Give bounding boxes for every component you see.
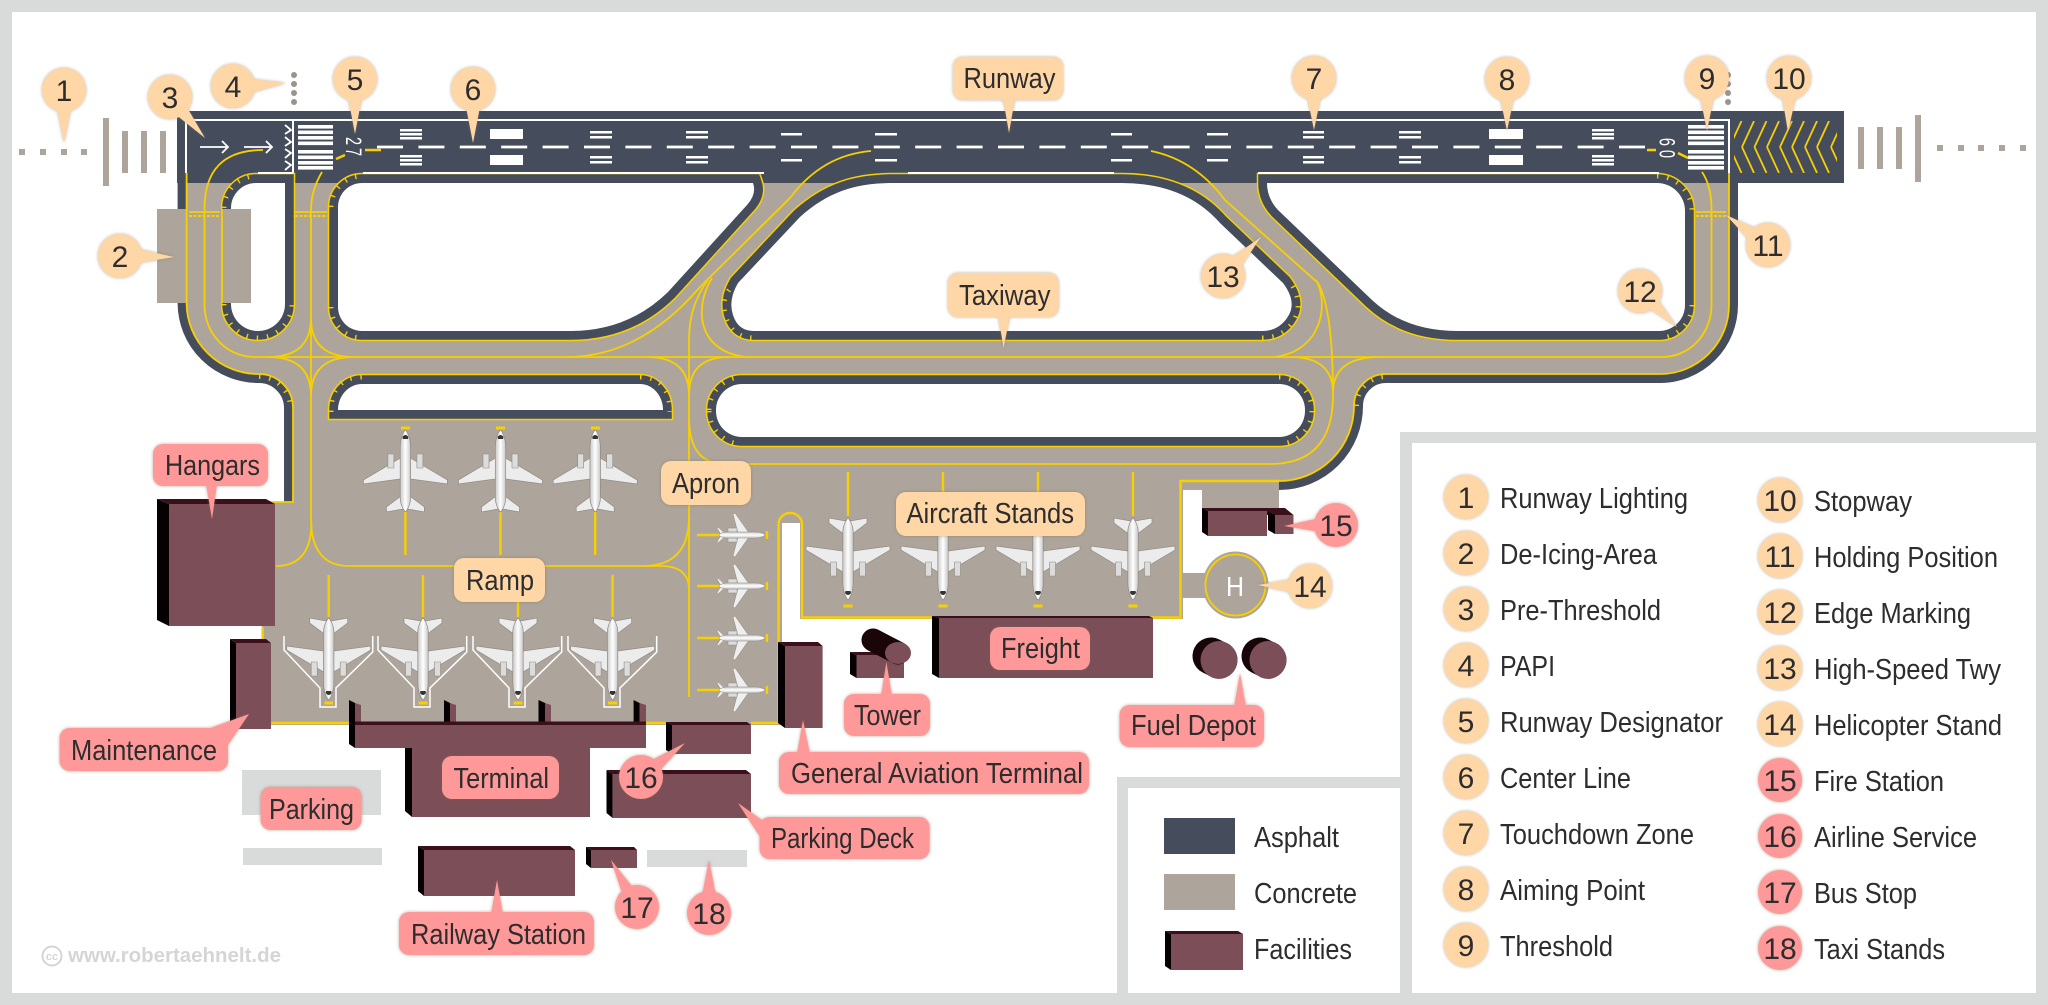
legend column two: 10	[1763, 485, 1797, 518]
taxi stands	[647, 850, 747, 867]
legend column one: 7	[1458, 818, 1474, 851]
legend column one: Center Line	[1500, 763, 1631, 795]
legend column two: 12	[1763, 597, 1797, 630]
legend column two: 11	[1764, 541, 1796, 574]
panel: runway approach lighting left	[19, 118, 166, 186]
label: Apron: Apron	[672, 468, 740, 500]
legend column one: Threshold	[1500, 931, 1613, 963]
parking lots	[242, 770, 382, 865]
label: Terminal	[442, 756, 559, 799]
watermark: cc	[46, 951, 58, 963]
legend column one: 2	[1458, 538, 1474, 571]
panel: runway approach lighting right	[1858, 115, 2026, 182]
marker 17: 17	[620, 892, 654, 925]
text: concrete: Concrete	[1254, 878, 1357, 910]
legend column one	[1444, 475, 1723, 967]
marker 7: 7	[1306, 63, 1322, 96]
building: bus stop	[586, 847, 637, 868]
building: parking deck	[606, 770, 751, 818]
label: Maintenance	[60, 714, 249, 771]
marker 1	[42, 68, 86, 143]
panel: surface legend	[1117, 777, 1412, 1005]
label: Parking	[261, 787, 362, 830]
marker 10	[1767, 56, 1811, 132]
marker 8	[1485, 57, 1529, 131]
marker 5: 5	[347, 64, 363, 97]
marker 4: 4	[225, 71, 241, 104]
legend column one: 8	[1458, 874, 1474, 907]
legend column two: 17	[1763, 877, 1797, 910]
marker 3	[148, 75, 205, 138]
legend column two: 14	[1763, 709, 1797, 742]
aircraft stand lines	[324, 428, 1138, 703]
marker 10: 10	[1772, 63, 1806, 96]
helicopter stand: H	[1226, 571, 1244, 602]
legend column one: 4	[1458, 650, 1474, 683]
label: Runway	[953, 57, 1063, 133]
building: terminal	[349, 700, 646, 817]
legend column two: Helicopter Stand	[1814, 710, 2002, 742]
marker 4	[211, 64, 286, 108]
marker 14: 14	[1293, 571, 1327, 604]
legend column one: Touchdown Zone	[1500, 819, 1694, 851]
label: Maintenance: Maintenance	[71, 735, 217, 767]
label: Hangars: Hangars	[165, 450, 260, 482]
marker 13	[1201, 237, 1261, 298]
label: Terminal: Terminal	[454, 763, 549, 795]
legend column two: 16	[1763, 821, 1797, 854]
label: Fuel Depot	[1120, 673, 1264, 747]
label: General Aviation Terminal	[779, 720, 1089, 794]
legend column two: Fire Station	[1814, 766, 1944, 798]
white stand guides	[284, 636, 657, 707]
label: Freight: Freight	[1001, 633, 1080, 665]
center line	[377, 146, 1645, 148]
panel: runway and stopway asphalt	[177, 111, 1844, 183]
marker 16: 16	[624, 762, 658, 795]
panel: numbered legend	[1400, 432, 2036, 993]
runway designator 09: 9	[1655, 138, 1680, 146]
legend column one: Runway Lighting	[1500, 483, 1688, 515]
threshold bars	[298, 125, 1724, 170]
label: Aircraft Stands	[896, 492, 1085, 536]
marker 5	[333, 57, 377, 134]
label: Ramp: Ramp	[466, 565, 534, 597]
legend column two: Taxi Stands	[1814, 934, 1945, 966]
building: tower	[850, 640, 911, 678]
marker 12: 12	[1623, 276, 1657, 309]
building: maintenance	[230, 639, 271, 729]
marker 11	[1726, 215, 1790, 267]
runway designator 27: 7	[341, 148, 366, 156]
marker 8: 8	[1499, 64, 1515, 97]
panel: taxiway islands	[231, 183, 1685, 437]
marker 2	[98, 234, 174, 278]
stopway chevrons	[1730, 121, 1843, 173]
runway markings	[186, 120, 1729, 173]
legend column one: PAPI	[1500, 651, 1555, 683]
label: Ramp	[454, 558, 545, 602]
marker 13: 13	[1206, 261, 1240, 294]
label: Railway Station	[399, 880, 594, 955]
legend column two: High-Speed Twy	[1814, 654, 2001, 686]
legend column one: 1	[1458, 482, 1474, 515]
legend column two: Bus Stop	[1814, 878, 1917, 910]
label: Taxiway	[948, 273, 1059, 348]
aircraft: freight stands	[806, 518, 1175, 600]
marker 18: 18	[692, 898, 726, 931]
marker 2: 2	[112, 241, 128, 274]
marker 7	[1292, 56, 1336, 130]
legend column one: 6	[1458, 762, 1474, 795]
legend column two: Airline Service	[1814, 822, 1977, 854]
building: fire station	[1202, 508, 1294, 536]
swatch: facilities	[1165, 931, 1243, 970]
pre-threshold arrows	[200, 125, 291, 170]
marker 15	[1284, 503, 1358, 547]
holding positions	[189, 212, 1726, 216]
legend column one: De-Icing-Area	[1500, 539, 1658, 571]
marker 9	[1685, 56, 1729, 131]
runway designator 09: 0	[1655, 150, 1680, 158]
text: facilities: Facilities	[1254, 934, 1352, 966]
yellow lead-in dashes	[336, 150, 1688, 159]
marker 9: 9	[1699, 63, 1715, 96]
marker 1: 1	[56, 75, 72, 108]
label: Tower	[844, 662, 930, 736]
label: Taxiway: Taxiway	[959, 280, 1051, 312]
marker 14	[1258, 564, 1332, 608]
label: Freight	[990, 627, 1090, 670]
legend column one: Runway Designator	[1500, 707, 1723, 739]
edge markings	[187, 173, 1729, 723]
legend column two: Stopway	[1814, 486, 1912, 518]
building: hangars	[157, 499, 275, 626]
aircraft: ramp lower row	[287, 618, 655, 700]
label: General Aviation Terminal: General Aviation Terminal	[791, 758, 1083, 790]
runway designator 09	[1655, 138, 1680, 158]
text: asphalt: Asphalt	[1254, 822, 1339, 854]
building: fuel depot	[1200, 641, 1286, 679]
swatch: asphalt	[1164, 818, 1235, 854]
marker 3: 3	[162, 82, 178, 115]
marker 17	[611, 860, 659, 929]
label: Hangars	[153, 444, 268, 519]
legend column two: Holding Position	[1814, 542, 1998, 574]
legend column one: Aiming Point	[1500, 875, 1645, 907]
icon: PAPI lights	[291, 72, 1731, 105]
marker 6	[451, 67, 495, 143]
taxiway centre lines	[204, 150, 1712, 697]
legend column two: 15	[1763, 765, 1797, 798]
aircraft: ramp upper row	[363, 430, 637, 512]
building: railway station	[418, 846, 575, 896]
marker 11: 11	[1752, 230, 1784, 263]
label: Parking Deck: Parking Deck	[771, 823, 914, 855]
runway designator 27	[341, 137, 366, 156]
label: Tower: Tower	[854, 700, 921, 732]
legend column one: 5	[1458, 706, 1474, 739]
marker 18	[687, 860, 731, 935]
label: Parking Deck	[738, 803, 930, 859]
panel: taxiway and apron pavement	[187, 173, 1729, 725]
label: Apron	[661, 461, 751, 505]
panel: de-icing area	[157, 209, 251, 303]
building: general aviation terminal	[778, 642, 823, 728]
legend column one: 9	[1458, 930, 1474, 963]
label: Fuel Depot: Fuel Depot	[1131, 710, 1256, 742]
label: Aircraft Stands: Aircraft Stands	[906, 498, 1074, 530]
aircraft: small jets	[717, 513, 765, 712]
helicopter stand	[1202, 552, 1268, 618]
building: airline service	[666, 722, 751, 754]
label: Railway Station: Railway Station	[411, 919, 586, 951]
marker 12	[1618, 269, 1677, 327]
marker 6: 6	[465, 74, 481, 107]
building: freight	[932, 616, 1153, 678]
swatch: concrete	[1164, 874, 1235, 910]
touchdown and aiming point bars	[400, 129, 1614, 166]
legend column two: 13	[1763, 653, 1797, 686]
label: Runway: Runway	[964, 63, 1056, 95]
legend column two: Edge Marking	[1814, 598, 1971, 630]
watermark: www.robertaehnelt.de	[67, 945, 281, 967]
marker 15: 15	[1319, 510, 1353, 543]
legend column two	[1758, 478, 2002, 970]
legend column two: 18	[1763, 933, 1797, 966]
legend column one: 3	[1458, 594, 1474, 627]
marker 16	[619, 743, 685, 799]
label: Parking: Parking	[269, 794, 354, 826]
runway designator 27: 2	[341, 137, 366, 145]
legend column one: Pre-Threshold	[1500, 595, 1661, 627]
